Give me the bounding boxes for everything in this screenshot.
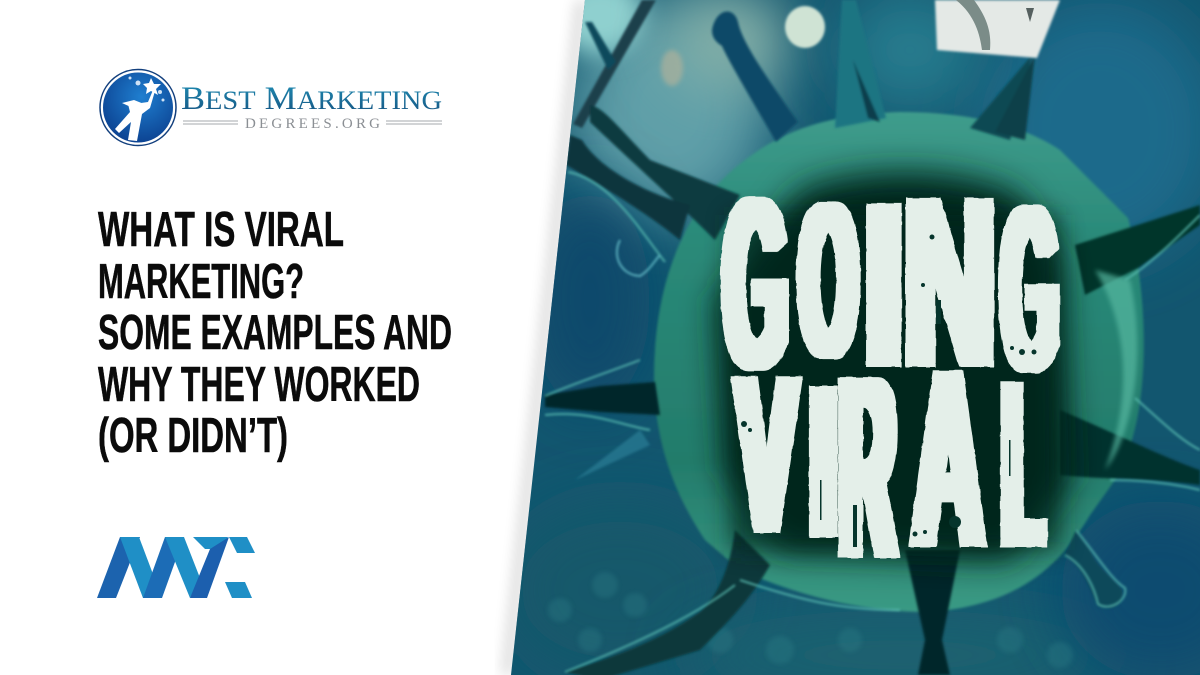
icon: graduate reaching for stars <box>100 70 176 146</box>
headline artwork: VIRAL: L <box>1003 330 1043 596</box>
headline artwork: VIRAL <box>730 370 1048 558</box>
virus body <box>654 112 1144 612</box>
title: MARKETING? <box>98 255 304 309</box>
headline artwork: GOING: I <box>863 154 905 416</box>
headline artwork: GOING: G <box>1002 157 1057 420</box>
title: (OR DIDN’T) <box>98 409 288 463</box>
title: WHY THEY WORKED <box>98 358 420 412</box>
icon: floating particle <box>785 6 825 48</box>
headline artwork: GOING: O <box>800 157 857 403</box>
body shading behind lettering <box>715 172 1137 560</box>
logo: MT mark <box>97 537 255 598</box>
highlights: spike rim light <box>545 172 1200 672</box>
logo wordmark: BEST MARKETING <box>181 81 442 117</box>
photo panel: going viral virus artwork <box>500 0 1200 675</box>
icon: white paper card <box>935 0 1060 58</box>
headline artwork: GOING: G <box>724 147 787 420</box>
title <box>98 203 452 463</box>
logo subline: DEGREES.ORG <box>245 116 380 132</box>
icon: small orange speck <box>661 50 683 86</box>
headline artwork: VIRAL: R <box>840 322 895 613</box>
logo: Best Marketing Degrees <box>100 70 442 146</box>
headline artwork: GOING: N <box>904 147 996 419</box>
headline artwork: VIRAL: I <box>809 341 838 584</box>
distress marks on lettering <box>741 234 1036 547</box>
title: SOME EXAMPLES AND <box>98 306 452 360</box>
title: WHAT IS VIRAL <box>98 203 344 257</box>
headline artwork: VIRAL: V <box>737 329 796 581</box>
headline artwork: VIRAL: A <box>913 316 983 600</box>
headline artwork: GOING <box>720 196 1060 374</box>
spikes: virus protrusions <box>545 0 1200 675</box>
background cell bubbles <box>548 572 1073 668</box>
